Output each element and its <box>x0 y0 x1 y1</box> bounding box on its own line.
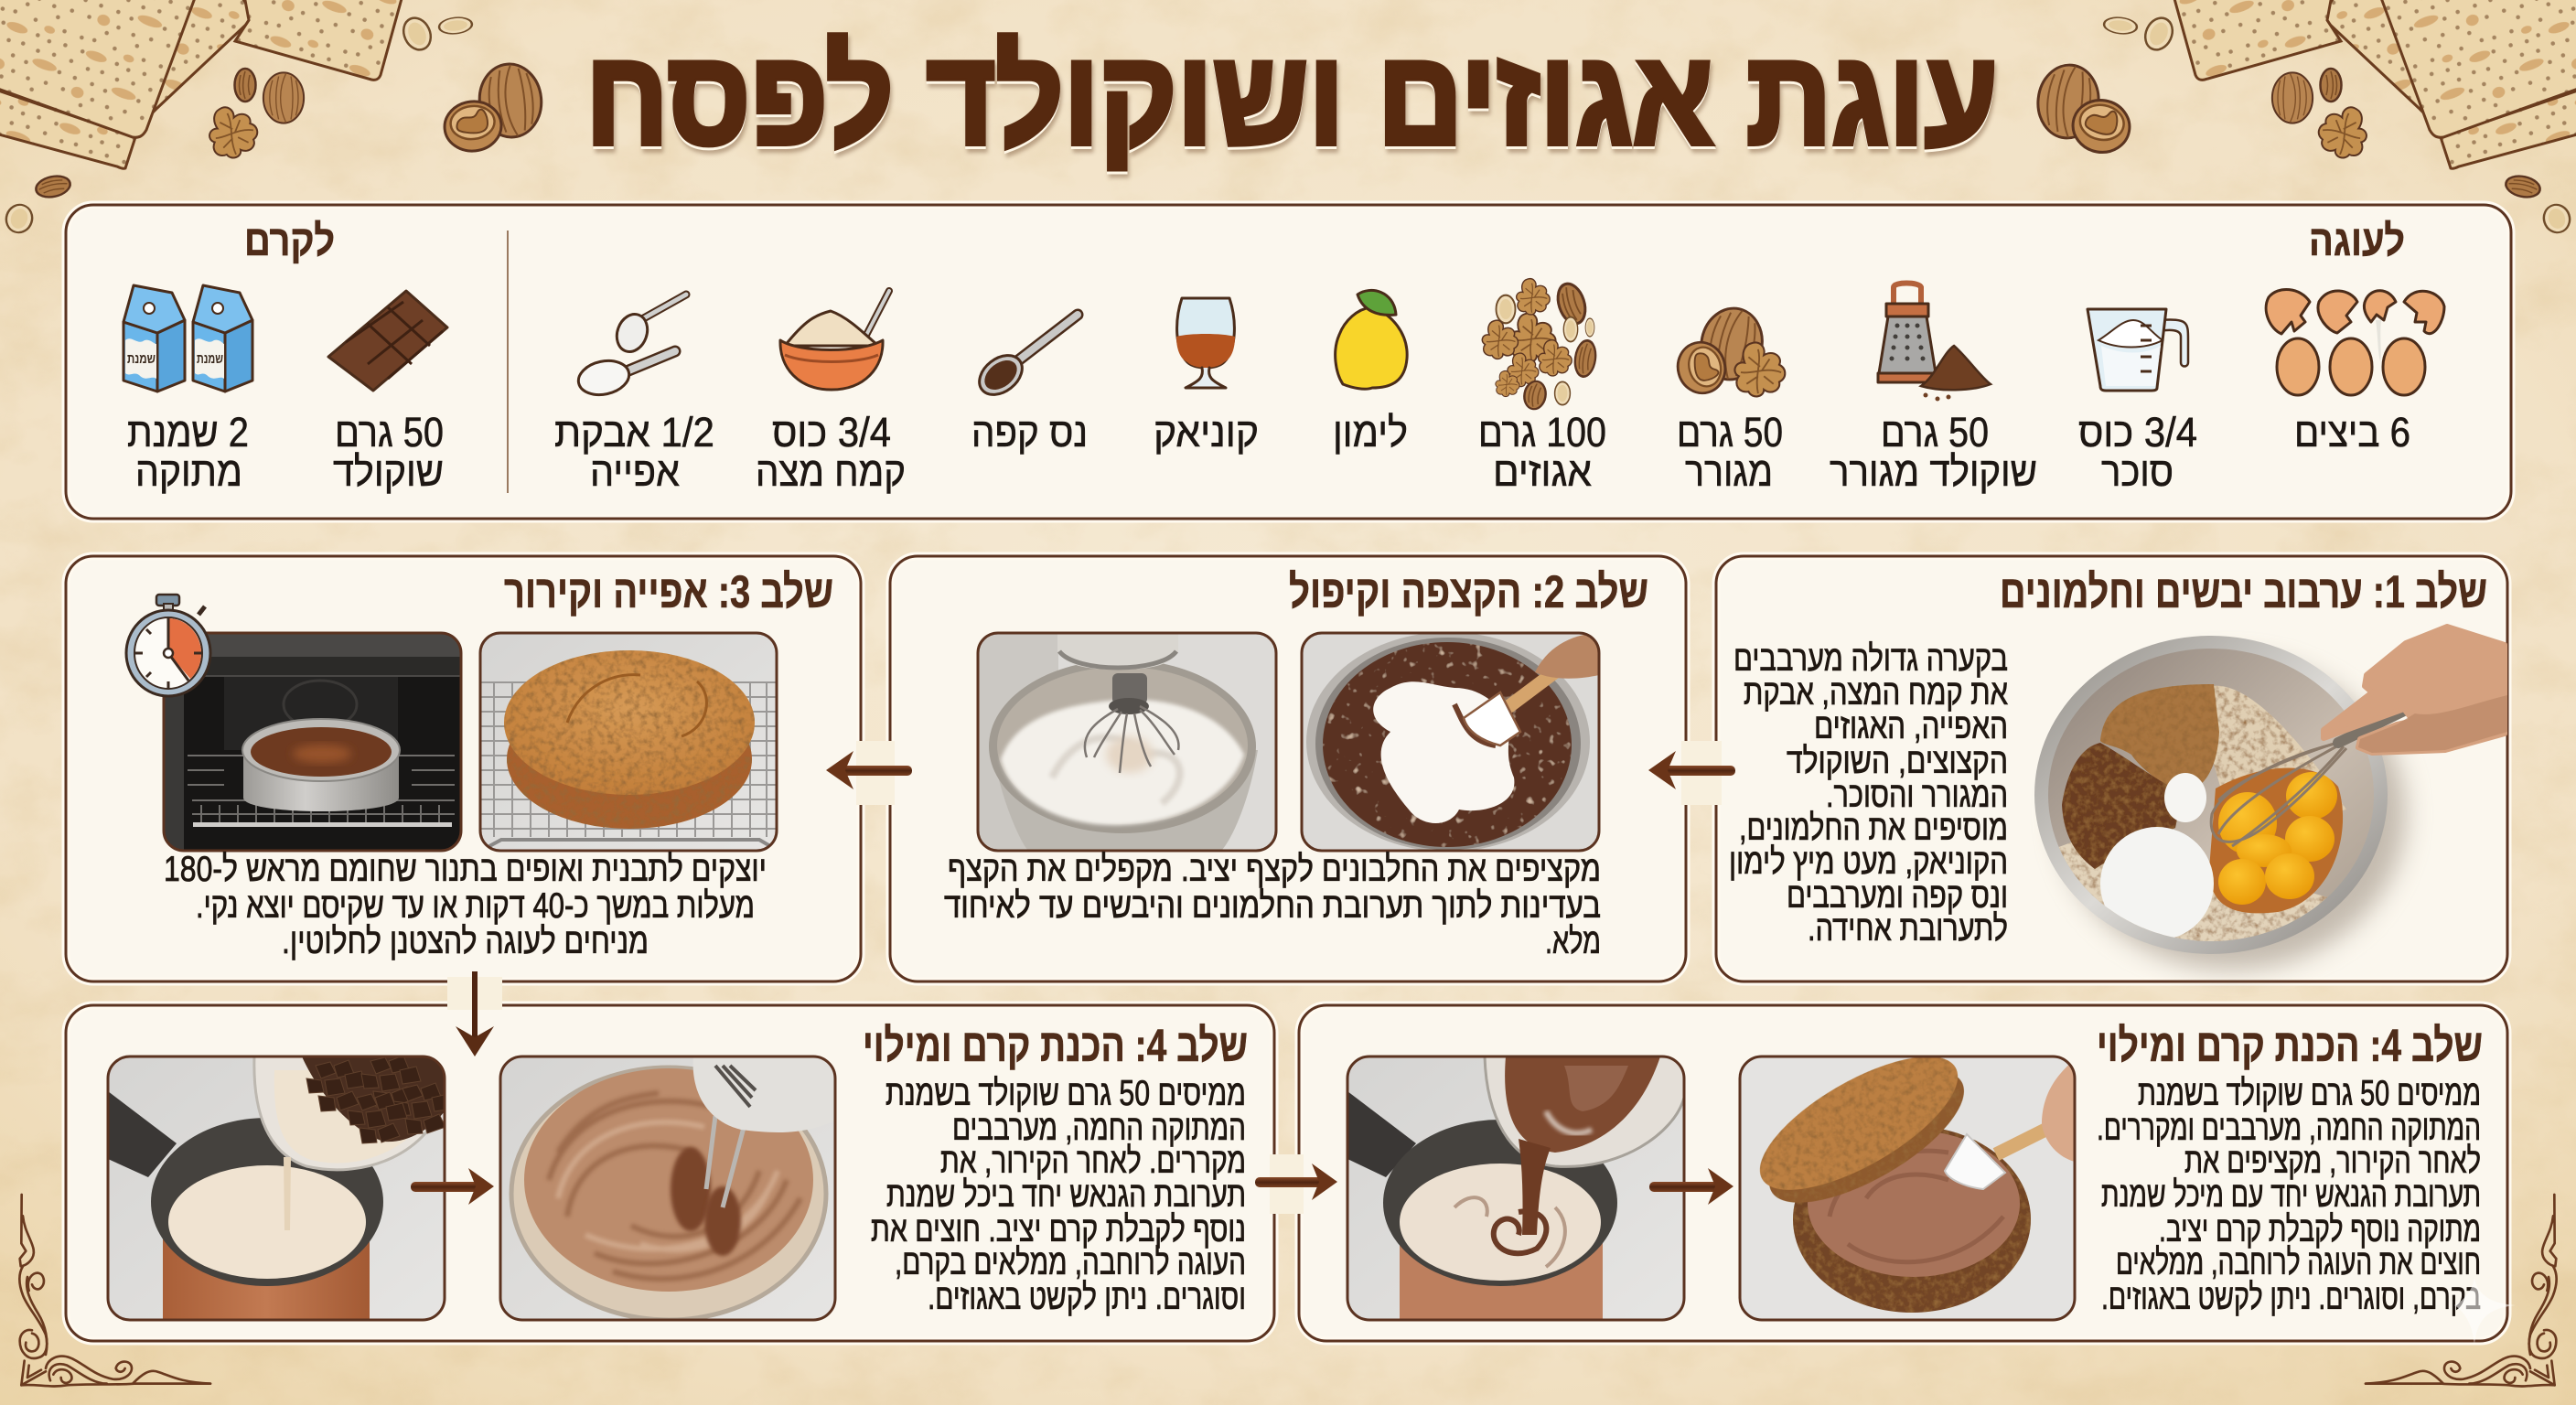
text: step 4 left description: ממיסים 50 גרם שוקולד בשמנת <box>886 1074 1246 1113</box>
labels: ingredient names: נס קפה <box>971 409 1088 456</box>
ornament: bottom right corner <box>2366 1195 2557 1386</box>
decoration: matzah and nuts top right <box>2103 0 2576 236</box>
arrow: step 1 to step 2 <box>1648 741 1735 805</box>
labels: ingredient names: 6 ביצים <box>2294 409 2410 456</box>
photo: cake pan in oven <box>164 633 461 851</box>
photo: cooled cake on rack <box>480 633 777 851</box>
heading: for the cream: לקרם <box>244 216 335 264</box>
panel: step 4 filling (right) <box>1299 1005 2507 1341</box>
icon: walnuts grated <box>1672 303 1785 399</box>
icon: cream cartons: שמנת <box>127 351 156 367</box>
arrow: pan to whipped cream (left panel) <box>411 1168 494 1205</box>
text: step 4 right description: לאחר הקירור, מקציפים את <box>2184 1142 2481 1181</box>
panel: step 2 whip and fold <box>890 556 1686 981</box>
text: step 3 description <box>164 850 767 961</box>
text: step 4 left description <box>871 1074 1246 1317</box>
photo: whipping chocolate cream <box>500 1056 835 1320</box>
text: step 1 description: האפייה, האגוזים <box>1814 707 2008 746</box>
arrow: step 2 to step 3 <box>826 741 912 805</box>
icon: bowl of matzah flour <box>780 291 889 390</box>
icon: pile of nuts <box>1482 279 1598 411</box>
text: step 3 description: מניחים לעוגה להצטנן לחלוטין. <box>282 922 649 961</box>
labels: ingredient names: אפייה <box>590 448 680 495</box>
photo: folding egg whites into chocolate <box>1302 632 1599 852</box>
arrow: step 3 down to step 4 <box>447 971 502 1056</box>
text: step 4 left description: וסוגרים. ניתן לקשט באגוזים. <box>928 1278 1246 1317</box>
heading: step 4 left: שלב 4: הכנת קרם ומילוי <box>863 1020 1248 1071</box>
heading: step 2: שלב 2: הקצפה וקיפול <box>1289 566 1648 617</box>
icon: cognac glass <box>1176 298 1235 388</box>
labels: ingredient names: מגורר <box>1685 448 1773 495</box>
labels: ingredient names: 50 גרם <box>1677 409 1783 456</box>
panel: step 4 cream (left) <box>66 1005 1274 1341</box>
labels: ingredient names: לימון <box>1333 409 1408 456</box>
labels: ingredient names: 3/4 כוס <box>2078 409 2197 456</box>
text: step 4 left description: המתוקה החמה, מערבבים <box>952 1109 1246 1148</box>
photo: filling the cake <box>1740 1031 2075 1320</box>
icon: kitchen timer <box>126 595 210 696</box>
title: עוגת אגוזים ושוקולד לפסח <box>585 23 1998 172</box>
text: step 4 right description <box>2097 1074 2481 1317</box>
text: step 2 description: מקציפים את החלבונים לקצף יציב. מקפלים את הקצף <box>948 850 1601 889</box>
icon: grater with grated chocolate <box>1878 284 1991 401</box>
labels: ingredient names: סוכר <box>2101 448 2174 495</box>
icon: walnuts left of title <box>442 61 545 154</box>
photo: whipping egg whites <box>978 633 1276 851</box>
text: step 4 left description: נוסף לקבלת קרם יציב. חוצים את <box>871 1210 1246 1249</box>
labels: ingredient names: מתוקה <box>135 448 242 495</box>
icon: cream cartons: שמנת <box>197 351 223 367</box>
text: step 4 left description: מקררים. לאחר הקירור, את <box>940 1142 1246 1181</box>
ornament: bottom left corner <box>19 1195 210 1386</box>
photo: pouring cream on chocolate <box>108 1056 453 1320</box>
icon: cream cartons <box>123 285 252 391</box>
heading: step 3: שלב 3: אפייה וקירור <box>504 566 833 617</box>
text: step 1 description: מוסיפים את החלמונים, <box>1739 809 2008 848</box>
labels: ingredient names: 2 שמנת <box>127 409 249 456</box>
labels: ingredient names: קוניאק <box>1154 409 1259 456</box>
labels: ingredient names: 50 גרם <box>335 409 444 456</box>
labels: ingredient names <box>127 409 2410 495</box>
text: step 3 description: מעלות במשך כ-40 דקות או עד שקיסם יוצא נקי. <box>196 886 755 926</box>
labels: ingredient names: 50 גרם <box>1881 409 1989 456</box>
photo: mixing bowl with hand and whisk <box>2034 627 2507 970</box>
text: step 2 description: בעדינות לתוך תערובת החלמונים והיבשים עד לאיחוד <box>944 886 1601 926</box>
text: step 2 description <box>944 850 1601 961</box>
icon: coffee spoon <box>971 315 1078 402</box>
heading: step 4 right: שלב 4: הכנת קרם ומילוי <box>2097 1020 2483 1071</box>
text: step 1 description: המגורר והסוכר. <box>1826 776 2008 815</box>
text: step 2 description: מלא. <box>1545 922 1601 961</box>
arrow: left panel to right panel <box>1255 1154 1337 1214</box>
panel: ingredients <box>66 205 2511 519</box>
panel: step 3 bake and cool <box>66 556 861 981</box>
text: step 4 left description: תערובת הגנאש יחד ביכל שמנת <box>886 1175 1246 1215</box>
text: step 3 description: יוצקים לתבנית ואופים בתנור שחומם מראש ל-180 <box>164 850 767 889</box>
panel: step 1 mix dry and yolks <box>1716 556 2507 981</box>
labels: ingredient names: 100 גרם <box>1478 409 1606 456</box>
labels: ingredient names: שוקולד מגורר <box>1830 448 2037 495</box>
photo: pouring ganache <box>1347 1056 1684 1320</box>
decoration: matzah and nuts top left <box>0 0 473 236</box>
text: step 1 description: הקצוצים, השוקולד <box>1787 742 2008 781</box>
heading: step 1: שלב 1: ערבוב יבשים וחלמונים <box>2000 566 2487 617</box>
icon: chocolate bar <box>328 291 447 391</box>
decoration: faint sparkle <box>2454 1278 2516 1345</box>
labels: ingredient names: שוקולד <box>333 448 444 495</box>
icon: eggs <box>2266 289 2444 395</box>
text: step 1 description: את קמח המצה, אבקת <box>1744 673 2008 713</box>
text: step 1 description: הקוניאק, מעט מיץ לימון <box>1729 842 2008 882</box>
heading: for the cake: לעוגה <box>2309 216 2405 264</box>
labels: ingredient names: אגוזים <box>1493 448 1592 495</box>
arrow: pan to filled cake (right panel) <box>1649 1168 1733 1205</box>
text: step 1 description: בקערה גדולה מערבבים <box>1733 639 2008 679</box>
text: step 1 description: לתערובת אחידה. <box>1808 909 2008 949</box>
text: step 1 description: ונס קפה ומערבבים <box>1787 876 2008 916</box>
icon: lemon <box>1336 290 1407 389</box>
labels: ingredient names: קמח מצה <box>756 448 906 495</box>
icon: baking powder spoons <box>575 295 686 399</box>
text: step 4 right description: ממיסים 50 גרם שוקולד בשמנת <box>2138 1074 2481 1113</box>
labels: ingredient names: 3/4 כוס <box>772 409 891 456</box>
text: step 1 description <box>1729 639 2008 949</box>
icon: walnuts right of title <box>2034 62 2133 156</box>
labels: ingredient names: 1/2 אבקת <box>554 409 714 456</box>
icon: measuring cup with sugar <box>2088 309 2188 391</box>
text: step 4 left description: העוגה לרוחבה, ממלאים בקרם, <box>895 1243 1246 1282</box>
